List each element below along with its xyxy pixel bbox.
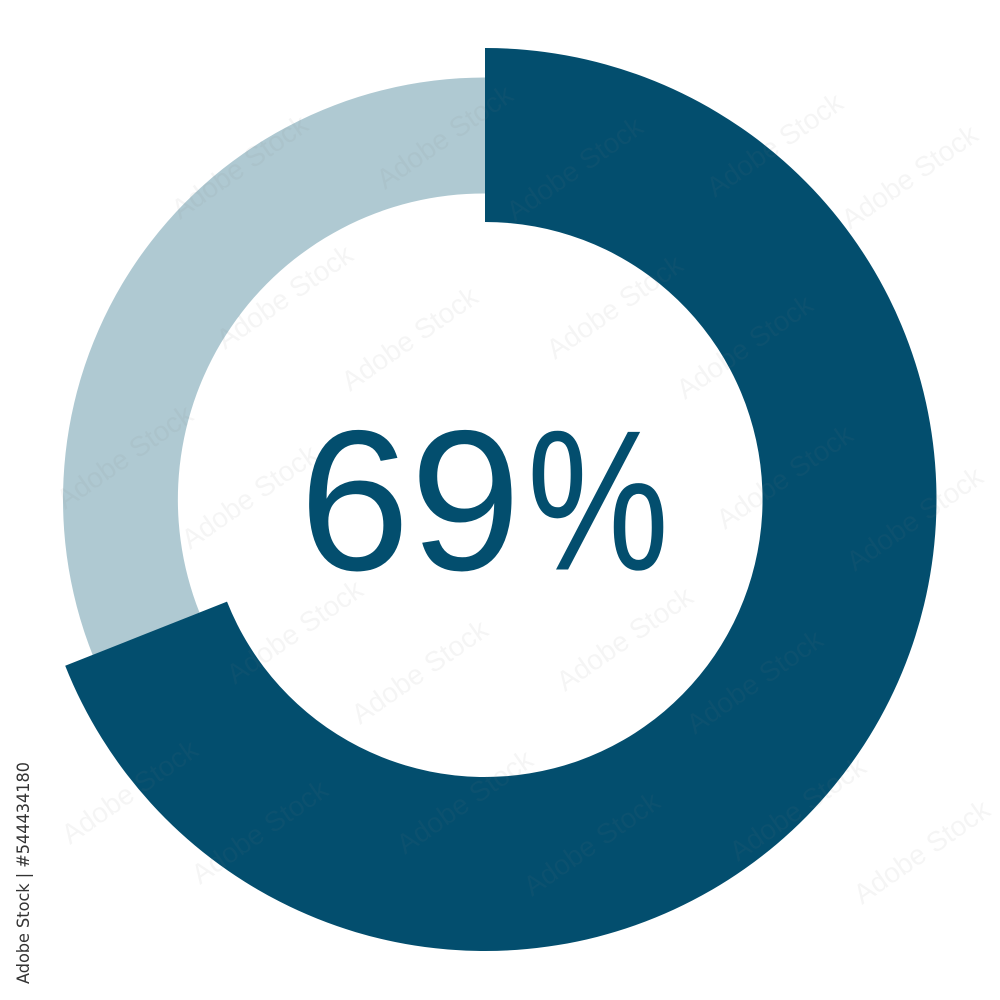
watermark pattern: Adobe Stock <box>711 418 859 535</box>
filled 69% dark ring segment <box>65 48 936 951</box>
watermark pattern: Adobe Stock <box>56 733 204 850</box>
watermark pattern: Adobe Stock <box>671 288 819 405</box>
stock id side label: Adobe Stock | #544434180 <box>14 762 34 984</box>
watermark pattern: Adobe Stock <box>51 398 199 515</box>
center percentage value: % <box>527 390 669 612</box>
watermark pattern: Adobe Stock <box>724 750 872 867</box>
watermark pattern <box>51 78 996 910</box>
center percentage value: 69 <box>299 390 521 612</box>
watermark pattern: Adobe Stock <box>186 773 334 890</box>
watermark pattern: Adobe Stock <box>518 785 666 902</box>
watermark pattern: Adobe Stock <box>841 460 989 577</box>
watermark pattern: Adobe Stock <box>211 238 359 355</box>
donut chart <box>63 48 936 951</box>
watermark pattern: Adobe Stock <box>221 573 369 690</box>
watermark pattern: Adobe Stock <box>551 580 699 697</box>
watermark pattern: Adobe Stock <box>836 118 984 235</box>
watermark pattern: Adobe Stock <box>848 793 996 910</box>
watermark pattern: Adobe Stock <box>701 86 849 203</box>
watermark pattern: Adobe Stock <box>681 623 829 740</box>
watermark pattern: Adobe Stock <box>346 613 494 730</box>
watermark pattern: Adobe Stock <box>371 78 519 195</box>
watermark pattern: Adobe Stock <box>336 280 484 397</box>
watermark pattern: Adobe Stock <box>501 110 649 227</box>
watermark pattern: Adobe Stock <box>391 743 539 860</box>
remaining 31% light ring segment <box>63 78 485 655</box>
watermark pattern: Adobe Stock <box>166 108 314 225</box>
watermark pattern: Adobe Stock <box>176 438 324 555</box>
watermark pattern: Adobe Stock <box>541 248 689 365</box>
